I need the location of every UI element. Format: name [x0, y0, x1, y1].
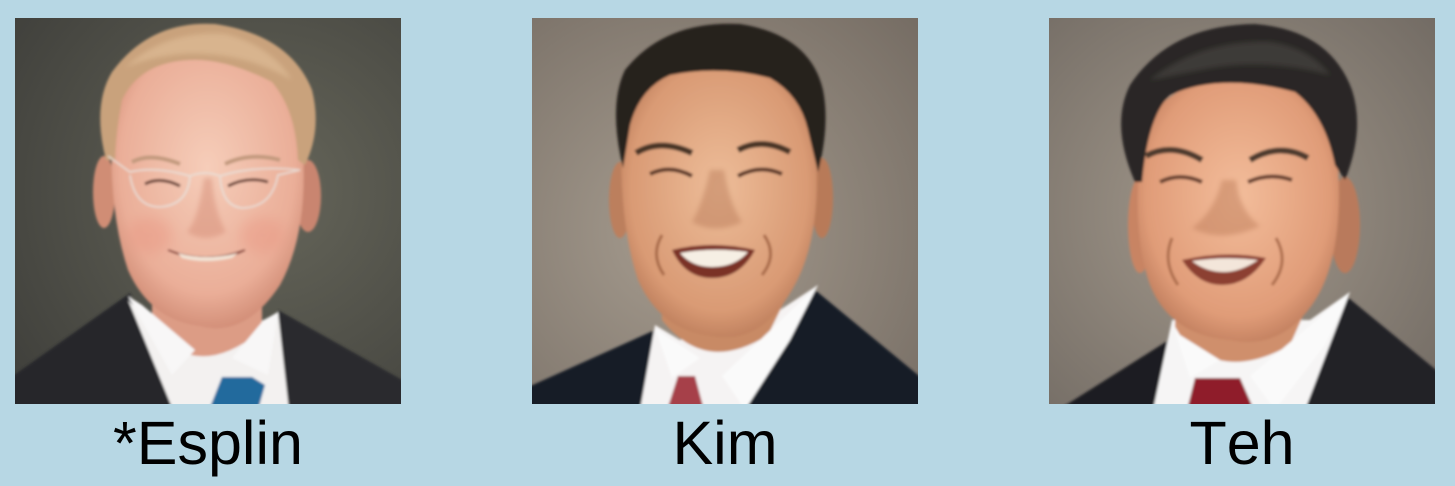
portrait: Esplin — [10, 18, 406, 410]
name: Teh: Teh — [1189, 409, 1295, 477]
name: Kim: Kim — [672, 409, 778, 477]
portrait: Teh — [1049, 18, 1441, 410]
portrait: Kim — [526, 18, 924, 410]
name: Esplin: *Esplin — [113, 409, 303, 477]
